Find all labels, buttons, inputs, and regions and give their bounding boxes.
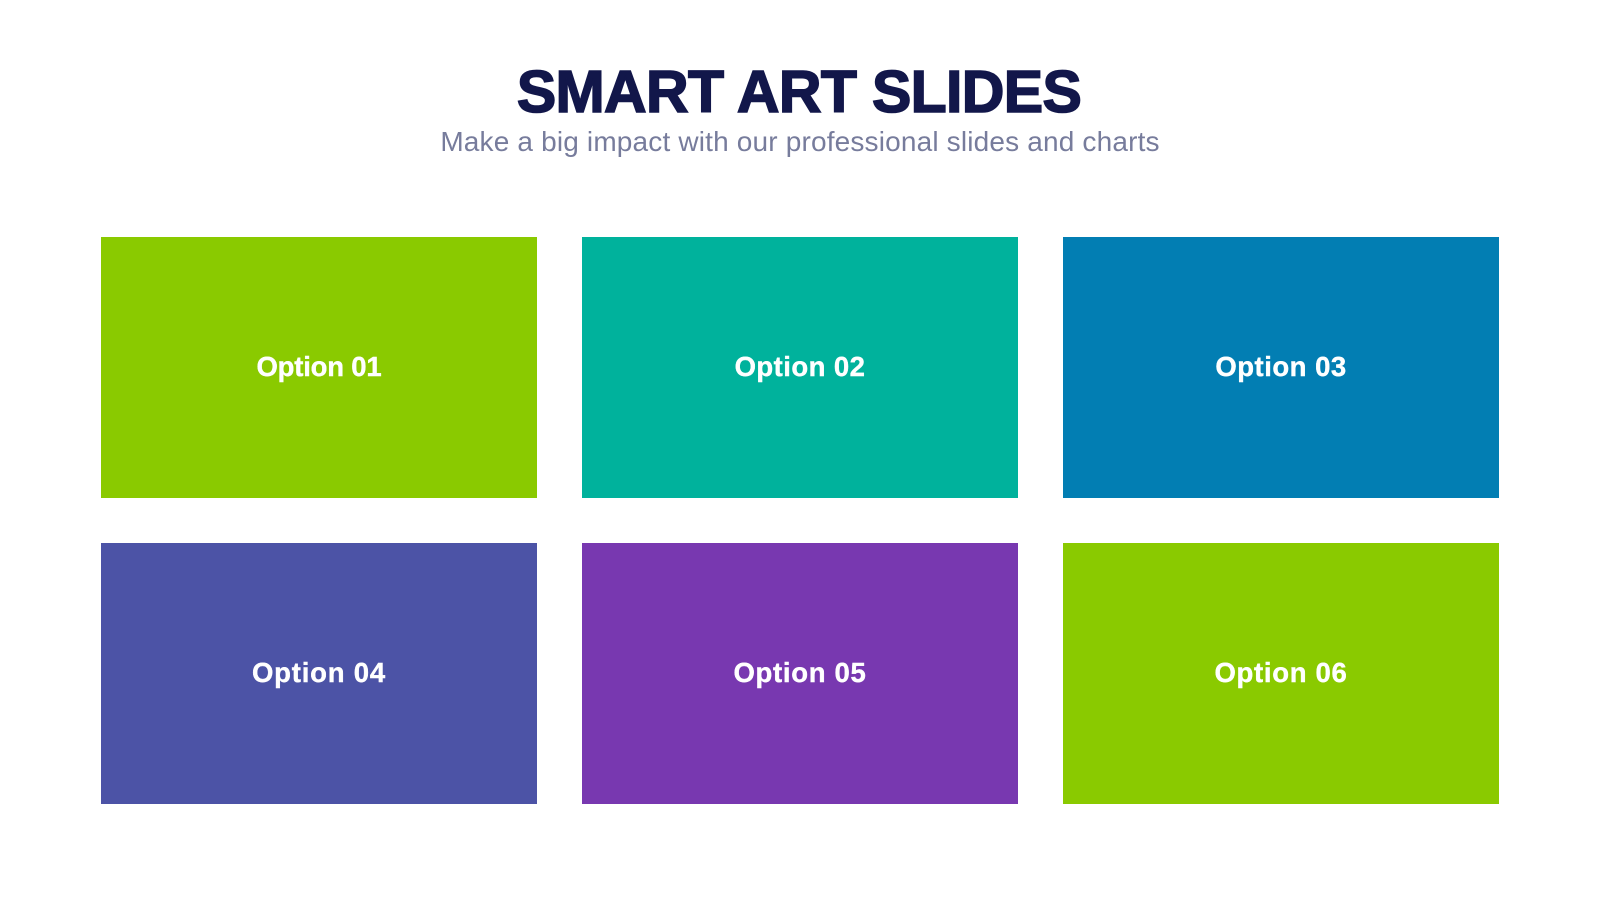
title: SMART ART SLIDES (517, 59, 1081, 125)
panel: option 06 (1063, 543, 1499, 804)
panel: option 03 (1063, 237, 1499, 498)
panel: option 05 (582, 543, 1018, 804)
panel: option 01: Option 01 (256, 350, 382, 382)
panel: option 02: Option 02 (735, 350, 865, 382)
panel: option 02 (582, 237, 1018, 498)
panel: option 04: Option 04 (252, 656, 386, 688)
subtitle: Make a big impact with our professional slides and charts (440, 126, 1160, 157)
panel: option 03: Option 03 (1215, 350, 1347, 382)
panel: option 01 (101, 237, 537, 498)
panel: option 06: Option 06 (1214, 656, 1348, 688)
panel: option 05: Option 05 (733, 656, 867, 688)
panel: option 04 (101, 543, 537, 804)
